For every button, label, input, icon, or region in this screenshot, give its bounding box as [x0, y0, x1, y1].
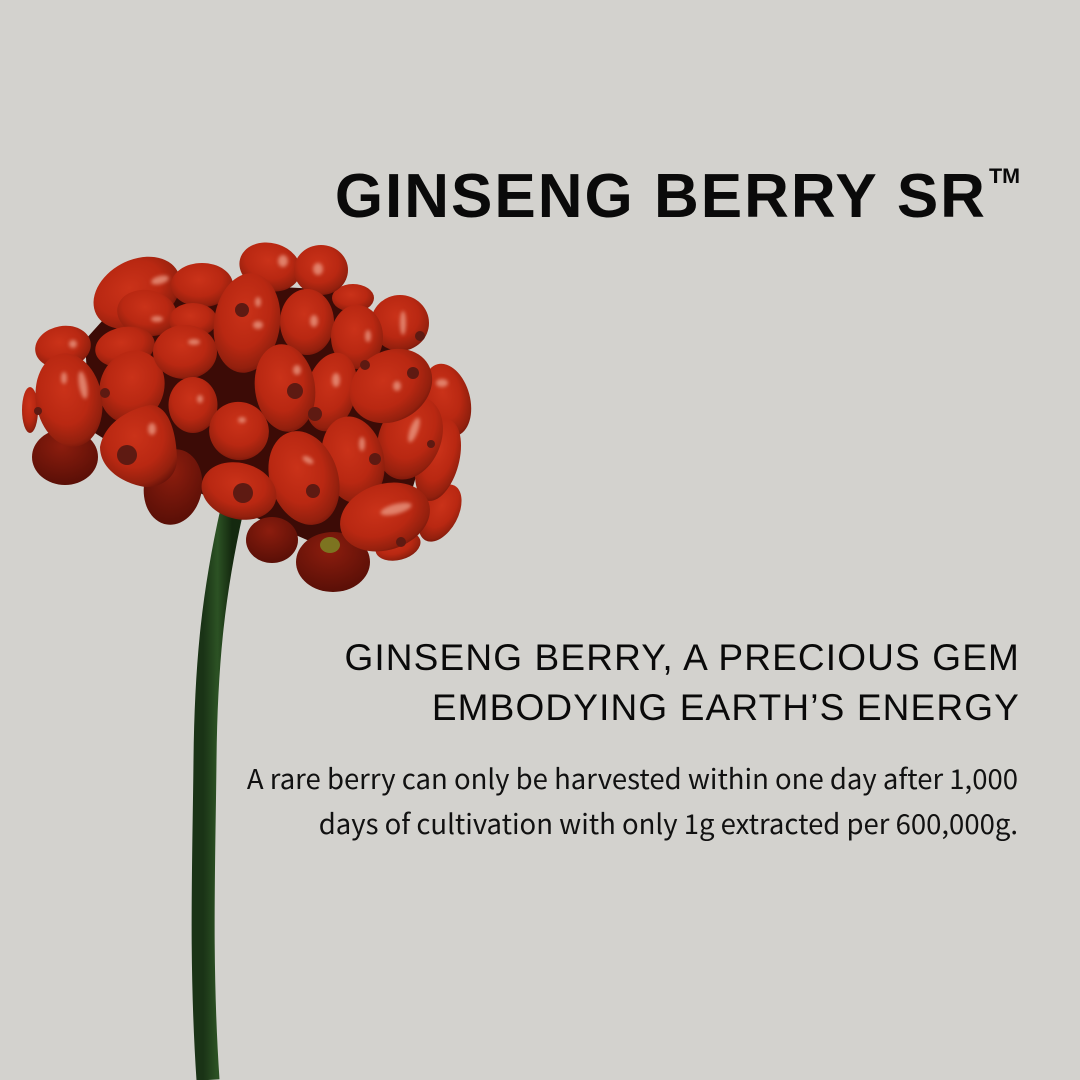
body text [247, 757, 1018, 842]
berry highlights [61, 255, 448, 518]
subtitle: EMBODYING EARTH’S ENERGY [432, 687, 1020, 728]
body text: days of cultivation with only 1g extracted per 600,000g. [319, 802, 1018, 842]
subtitle [344, 637, 1020, 728]
body text: A rare berry can only be harvested within one day after 1,000 [247, 757, 1018, 797]
title: GINSENG BERRY SRTM [335, 162, 1020, 231]
cluster core shadow [85, 285, 430, 550]
berry seed marks [34, 303, 435, 547]
berry cluster [22, 236, 479, 592]
stem [203, 510, 232, 1080]
subtitle: GINSENG BERRY, A PRECIOUS GEM [344, 637, 1020, 678]
calyx [320, 537, 340, 553]
